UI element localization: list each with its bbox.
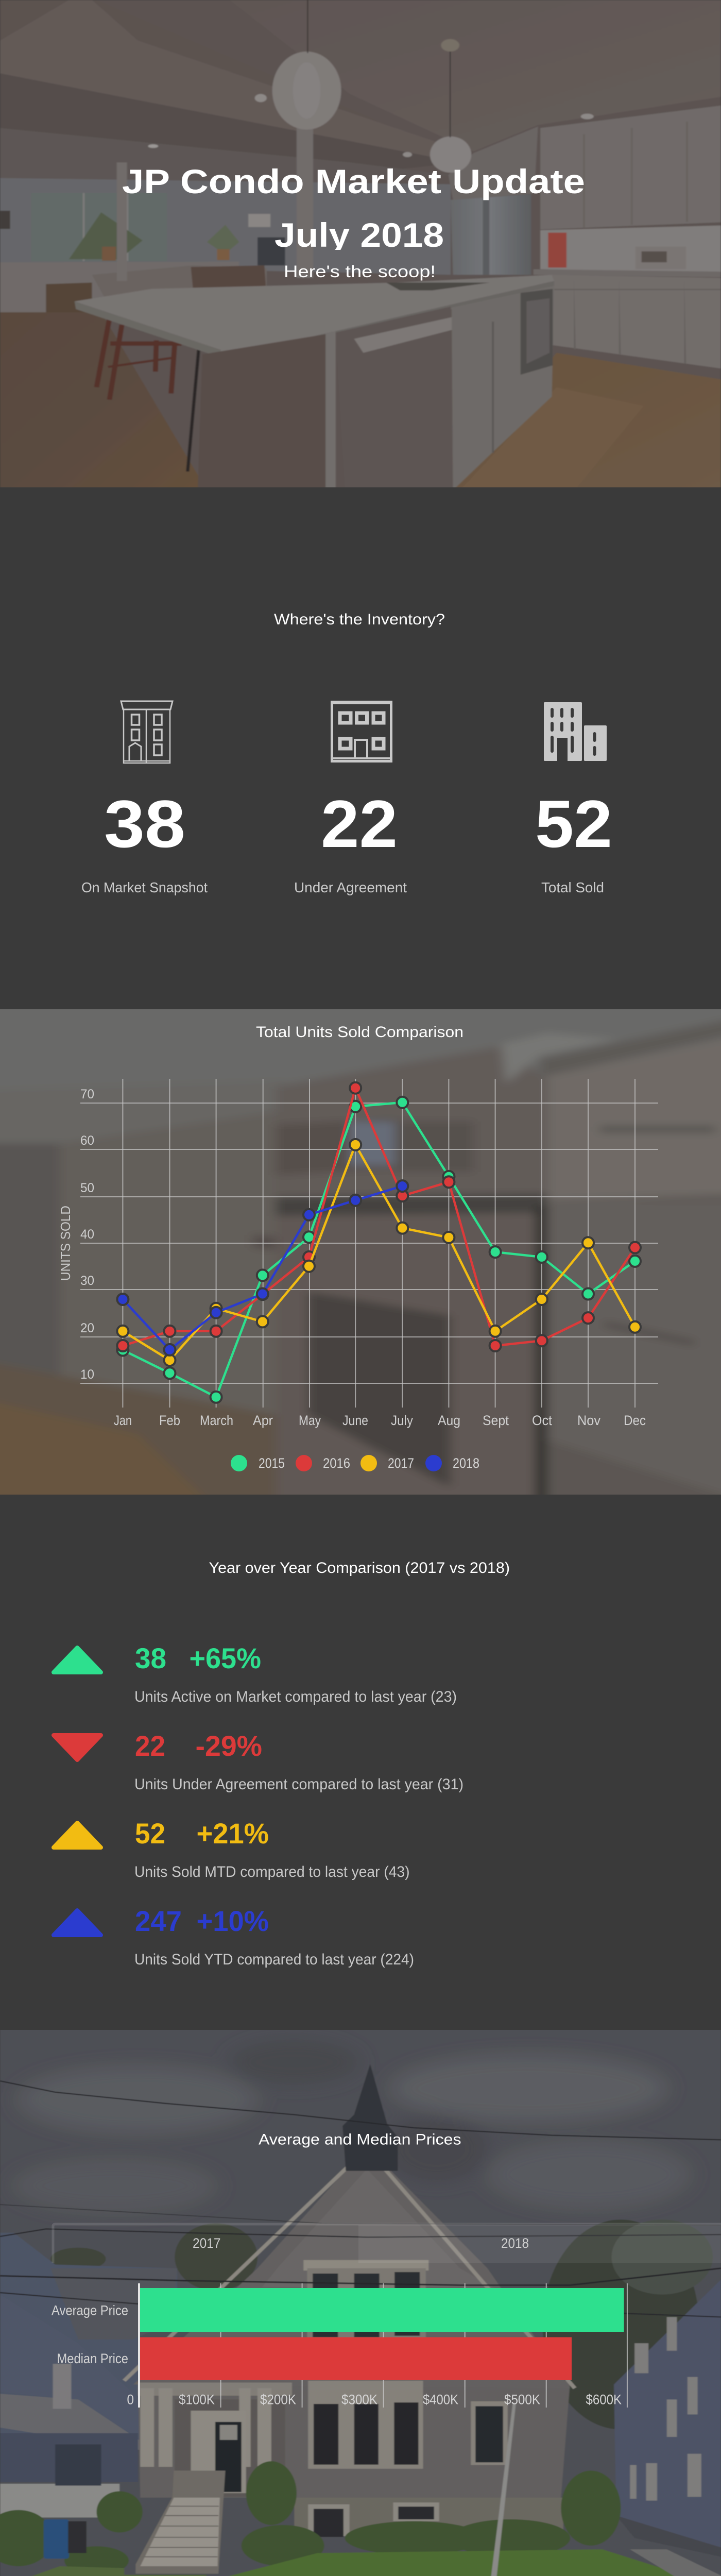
x axis labels: Dec xyxy=(624,1413,646,1428)
bar labels xyxy=(52,2303,128,2366)
panel: year over year xyxy=(52,1560,510,1968)
x axis labels: $600K xyxy=(586,2392,622,2407)
row: units active xyxy=(54,1642,457,1705)
stat: under agreement: 22 xyxy=(321,786,398,861)
series 2018 xyxy=(117,1180,408,1355)
description: Units Sold YTD compared to last year (224) xyxy=(134,1951,414,1968)
x axis labels: Sept xyxy=(483,1413,509,1428)
description: Units Active on Market compared to last year (23) xyxy=(134,1688,457,1705)
x axis labels xyxy=(114,1413,646,1428)
value: 22 -29%: 22 xyxy=(135,1730,165,1762)
axis line xyxy=(138,2283,140,2408)
chart title: Average and Median Prices xyxy=(259,2131,461,2148)
x axis labels: March xyxy=(200,1413,233,1428)
x axis labels: 0 xyxy=(127,2392,134,2407)
row: units under agreement xyxy=(54,1730,464,1793)
x axis labels: Apr xyxy=(253,1413,273,1428)
description: Units Under Agreement compared to last year (31) xyxy=(134,1776,464,1793)
lower facade windows xyxy=(308,2381,423,2469)
icon: narrow townhouse xyxy=(121,701,173,763)
subtitle: Here's the scoop! xyxy=(284,262,436,281)
panel: prices xyxy=(0,2030,721,2576)
stat: on market xyxy=(81,786,208,895)
panel: hero xyxy=(0,0,721,487)
plants xyxy=(0,2461,621,2575)
value: 22 -29% xyxy=(135,1730,262,1762)
photo: house xyxy=(0,2025,721,2576)
icon: square building xyxy=(331,701,392,761)
bar labels: Median Price xyxy=(57,2351,128,2366)
main house xyxy=(138,2381,570,2498)
x axis labels: May xyxy=(299,1413,321,1428)
row: units sold mtd xyxy=(54,1817,410,1880)
value: 247 +10% xyxy=(135,1905,269,1937)
value: 52 +21%: 52 xyxy=(135,1817,165,1850)
value: 38 +65% xyxy=(135,1642,261,1674)
chart title: Total Units Sold Comparison xyxy=(256,1024,464,1041)
bar chart xyxy=(52,2224,721,2408)
stat: total sold: 52 xyxy=(535,786,612,861)
value: 22 -29%: -29% xyxy=(196,1730,262,1762)
y axis labels: 10 xyxy=(80,1367,94,1382)
value: 52 +21%: +21% xyxy=(197,1817,269,1850)
y axis labels: 40 xyxy=(80,1227,94,1242)
stat: on market: 38 xyxy=(104,786,185,861)
chart legend: 2018 xyxy=(453,1455,479,1471)
stat: total sold xyxy=(535,786,612,895)
year legend: 2018 xyxy=(501,2235,529,2251)
x axis labels: $100K xyxy=(179,2392,215,2407)
x axis labels: $200K xyxy=(260,2392,296,2407)
year legend: 2017 xyxy=(193,2235,220,2251)
upper windows xyxy=(303,2260,428,2270)
chart legend xyxy=(231,1455,479,1471)
porch xyxy=(138,2383,292,2396)
lawn, sidewalk xyxy=(202,2549,717,2576)
y axis labels: 50 xyxy=(80,1181,94,1195)
heading: year over year: Year over Year Comparison (2017 vs 2018) xyxy=(209,1560,510,1577)
x axis labels: June xyxy=(342,1413,368,1428)
hero photo: kitchen xyxy=(0,0,721,490)
chart photo background xyxy=(0,992,721,1513)
x axis labels: $300K xyxy=(341,2392,377,2407)
value: 247 +10%: 247 xyxy=(135,1905,182,1937)
series 2015 xyxy=(117,1097,641,1403)
value: 52 +21% xyxy=(135,1817,269,1850)
heading: inventory: Where's the Inventory? xyxy=(274,611,445,628)
x axis labels: Feb xyxy=(159,1413,180,1428)
description: Units Sold MTD compared to last year (43) xyxy=(134,1863,410,1880)
grid lines xyxy=(221,2283,627,2408)
series 2017 xyxy=(117,1139,641,1366)
stat: on market: On Market Snapshot xyxy=(81,879,208,895)
x axis labels: Nov xyxy=(577,1413,600,1428)
foundation xyxy=(294,2498,563,2533)
icon: office towers xyxy=(544,702,607,761)
icon: blue up triangle xyxy=(54,1910,101,1935)
year legend xyxy=(53,2224,721,2263)
title: JP Condo Market Update xyxy=(122,162,585,200)
x axis labels: Jan xyxy=(114,1413,132,1428)
stat: under agreement: Under Agreement xyxy=(294,879,407,895)
stat: total sold: Total Sold xyxy=(541,879,604,895)
chairs under counter xyxy=(97,318,182,400)
y axis labels: 70 xyxy=(80,1087,94,1101)
y axis labels xyxy=(80,1087,94,1382)
right neighbour xyxy=(614,2280,721,2548)
y axis title: UNITS SOLD xyxy=(58,1206,73,1281)
series 2016 xyxy=(117,1082,641,1351)
bar: average price xyxy=(140,2288,624,2332)
bar labels: Average Price xyxy=(52,2303,128,2318)
y axis labels: 20 xyxy=(80,1321,94,1335)
bar: median price xyxy=(140,2337,572,2380)
x axis labels: Oct xyxy=(532,1413,552,1428)
value: 247 +10%: +10% xyxy=(197,1905,269,1937)
chart legend: 2017 xyxy=(388,1455,414,1471)
title xyxy=(123,168,584,250)
icon: green up triangle xyxy=(54,1648,101,1672)
x axis labels: July xyxy=(391,1413,413,1428)
x axis labels: $400K xyxy=(423,2392,458,2407)
chart legend: 2015 xyxy=(259,1455,285,1471)
x axis labels: Aug xyxy=(438,1413,460,1428)
y axis labels: 30 xyxy=(80,1274,94,1288)
left neighbour xyxy=(0,2233,177,2448)
value: 38 +65%: 38 xyxy=(135,1642,166,1674)
title: July 2018 xyxy=(274,216,444,254)
stairs xyxy=(135,2470,226,2573)
chart legend: 2016 xyxy=(323,1455,350,1471)
wires xyxy=(0,2081,721,2317)
panel: inventory xyxy=(81,611,612,895)
y axis labels: 60 xyxy=(80,1133,94,1148)
icon: red down triangle xyxy=(54,1735,101,1760)
icon: yellow up triangle xyxy=(54,1823,101,1848)
panel: units sold chart xyxy=(0,1009,721,1495)
value: 38 +65%: +65% xyxy=(190,1642,261,1674)
x axis labels xyxy=(127,2392,622,2407)
x axis labels: $500K xyxy=(504,2392,540,2407)
stat: under agreement xyxy=(294,786,407,895)
line chart xyxy=(58,1079,658,1471)
row: units sold ytd xyxy=(54,1905,414,1968)
